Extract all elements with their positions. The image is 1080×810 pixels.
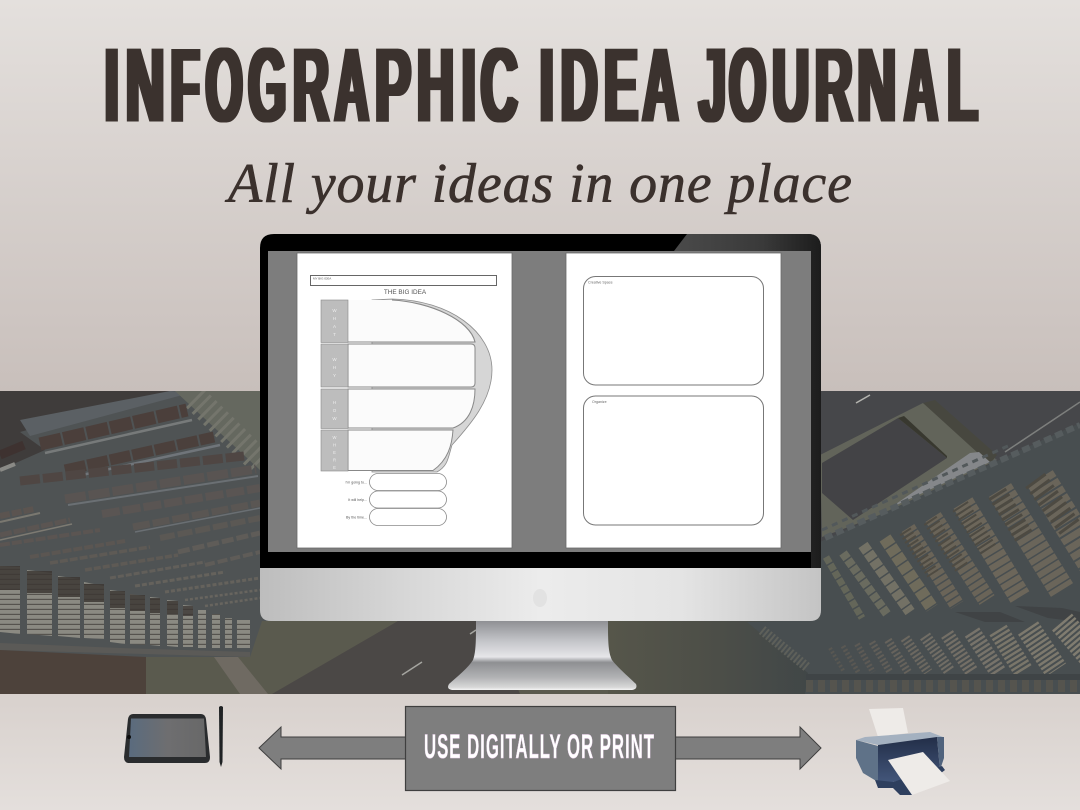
bulb section: how <box>321 389 475 428</box>
title: I <box>540 26 554 144</box>
bulb section: how: O <box>333 408 337 413</box>
bulb section: where: H <box>333 442 336 448</box>
bulb section: what: A <box>333 324 336 329</box>
bulb section: where <box>321 430 453 471</box>
title: F <box>171 26 200 144</box>
page heading: THE BIG IDEA <box>384 289 427 296</box>
output paper <box>888 752 950 795</box>
left journal page: the big idea <box>297 253 512 548</box>
right building facade <box>747 423 1080 694</box>
bulb section: why <box>321 344 475 387</box>
bezel sheen <box>674 234 821 568</box>
monitor bezel <box>260 234 821 568</box>
right journal page: creative space and organize <box>566 253 781 548</box>
photo band: looking up at skyscrapers <box>0 391 1080 694</box>
title: I <box>462 26 476 144</box>
title: R <box>293 26 329 144</box>
header box: MY BIG IDEA <box>313 276 331 280</box>
printer right side <box>937 737 944 770</box>
left upper building facade <box>0 391 260 606</box>
output tray <box>875 766 945 795</box>
bulb section: what: H <box>333 316 336 321</box>
right upper road and rooftop <box>821 391 1080 542</box>
double-headed arrow and label box <box>259 706 821 790</box>
arrow <box>259 727 821 769</box>
bulb section: why: W <box>332 357 337 362</box>
title: R <box>815 26 853 144</box>
title: A <box>642 26 677 144</box>
title: I <box>105 26 119 144</box>
monitor chin <box>260 568 821 621</box>
bulb section: where: W <box>333 435 337 440</box>
double-headed arrow and label box: USE DIGITALLY OR PRINT <box>424 728 655 766</box>
light bulb outline <box>372 299 492 472</box>
left lower building columns <box>0 566 250 648</box>
title: A <box>335 26 369 144</box>
bulb section: what: T <box>333 332 336 337</box>
bulb section: how: H <box>333 400 336 405</box>
bulb section: what <box>321 300 475 342</box>
screen <box>268 251 811 552</box>
bulb section: why: Y <box>333 373 336 378</box>
bulb base prompts: By the time... <box>346 516 367 520</box>
monitor stand <box>448 621 636 690</box>
printer left side <box>856 740 878 782</box>
creative space box: Creative Space <box>588 280 613 284</box>
title: O <box>729 26 766 144</box>
printer front <box>878 737 940 782</box>
bottom background <box>0 694 1080 810</box>
bulb section: why: H <box>333 365 336 370</box>
top background <box>0 0 1080 391</box>
icon: tablet <box>124 714 210 763</box>
icon: stylus <box>219 706 223 767</box>
title: C <box>481 26 518 144</box>
title: G <box>248 26 286 144</box>
bulb section: where: E <box>333 450 336 455</box>
title: N <box>126 26 164 144</box>
title: U <box>772 26 809 144</box>
bulb base prompts: It will help... <box>348 498 367 502</box>
subtitle: All your ideas in one place <box>224 153 852 215</box>
title: H <box>417 26 454 144</box>
creative space box <box>584 276 764 385</box>
icon: printer <box>856 708 950 795</box>
bulb section: where: E <box>333 465 336 470</box>
title: E <box>604 26 638 144</box>
title: D <box>561 26 598 144</box>
title: N <box>857 26 896 144</box>
header box <box>310 276 496 286</box>
monitor <box>260 234 821 690</box>
label box <box>406 706 676 790</box>
organize box <box>584 396 764 525</box>
logo smudge <box>533 589 547 607</box>
title: A <box>904 26 938 144</box>
title: P <box>375 26 411 144</box>
text: L <box>947 26 978 144</box>
organize box: Organize <box>592 400 607 404</box>
bulb base prompts <box>346 474 446 526</box>
bulb base prompts: I'm going to... <box>346 480 367 484</box>
bulb section: how: W <box>332 416 337 421</box>
bulb section: what: W <box>332 308 337 313</box>
title: O <box>206 26 243 144</box>
input paper <box>869 708 908 737</box>
printer top <box>856 732 943 745</box>
bulb section: where: R <box>333 458 336 462</box>
ground, road and lower band <box>0 621 830 694</box>
title: J <box>699 26 726 144</box>
